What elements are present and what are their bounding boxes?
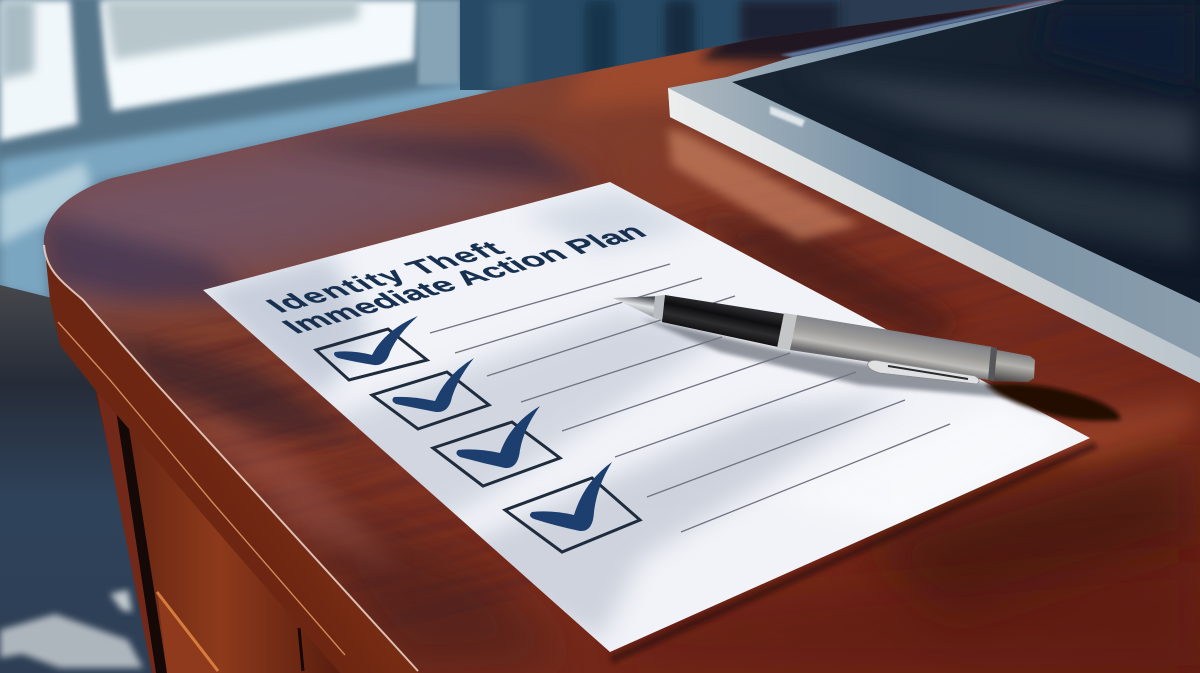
pen tip: [613, 296, 660, 319]
checkbox 1: [316, 316, 427, 380]
desk front edge band: [45, 250, 420, 673]
pen barrel ring: [988, 347, 997, 381]
ballpoint pen: [613, 295, 1035, 384]
window pane: main inner glass: [105, 0, 360, 60]
pen steel barrel: [790, 315, 993, 380]
window pane: main: [100, 0, 417, 111]
paper ruled lines: [430, 264, 950, 532]
paper shadow on desk: [610, 442, 1098, 664]
title: Identity Theft: Identity Theft: [258, 237, 512, 317]
pen shadow on paper and desk: [640, 318, 1120, 421]
checklist paper: [200, 182, 1090, 652]
tablet front edge: [668, 88, 1200, 383]
curtain behind the desk: [460, 0, 840, 90]
drawer highlight: [157, 592, 218, 671]
window frame: [0, 0, 490, 165]
cabinet lower drawer: [157, 590, 222, 673]
paper light and shadow bands: [200, 190, 1080, 640]
title: Immediate Action Plan: Immediate Action Plan: [274, 220, 654, 338]
checkbox 4: [505, 462, 640, 552]
pen tip ring: [653, 295, 665, 320]
window pane: left inner glass: [0, 0, 34, 80]
carpet sunlight patches: [0, 614, 143, 668]
screen reflections: [790, 5, 1195, 255]
window pane: left: [0, 0, 78, 141]
cabinet panel gap: [299, 628, 303, 671]
window sill: [0, 80, 490, 300]
tablet device: [668, 0, 1200, 383]
sill highlight: [0, 162, 90, 245]
pen clip slot: [888, 366, 968, 379]
window side trim: [418, 0, 460, 85]
desk cabinet front: [95, 390, 345, 673]
checkbox 3: [433, 406, 560, 486]
checkbox 2: [372, 358, 489, 429]
cabinet gap: [116, 410, 167, 673]
pen clip: [868, 360, 979, 384]
tablet speaker glint: [770, 106, 805, 127]
pen chrome ring: [777, 313, 797, 350]
tablet top rim glint: [780, 0, 1065, 57]
tablet body: [668, 0, 1200, 383]
pen black grip: [662, 295, 785, 347]
floor and carpet: [0, 285, 170, 673]
tablet screen: [732, 0, 1200, 303]
cabinet side post: [97, 392, 160, 673]
pen end cap: [994, 350, 1035, 382]
desk top edge highlight: [44, 245, 418, 671]
